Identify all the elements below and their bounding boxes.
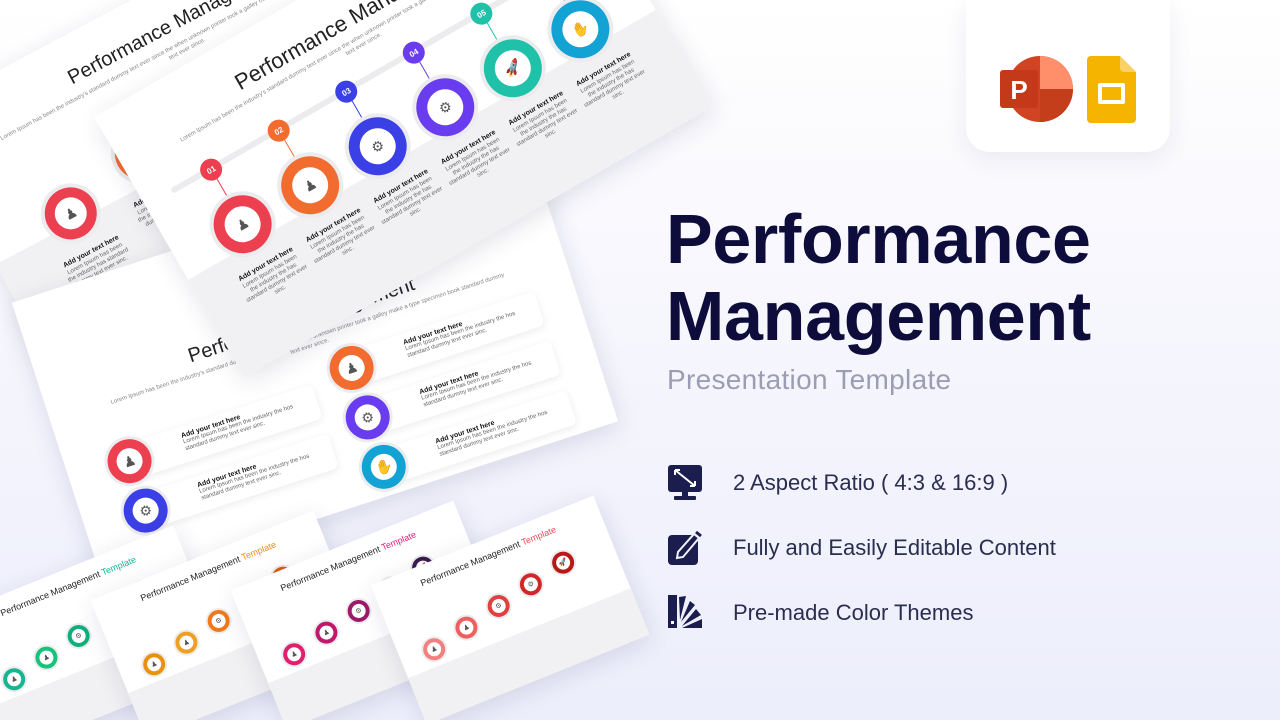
step 04: ⚙	[436, 97, 454, 117]
slide mockup: middle list layout: Lorem Ipsum has been the industry the hos standard dummy text ever sinc.	[437, 410, 548, 458]
small slide: orange theme: Performance Management Template	[139, 539, 278, 603]
feature: editable: Fully and Easily Editable Content	[733, 535, 1056, 560]
slide mockup: main front timeline	[94, 0, 712, 377]
slide mockup: back top-left: ♟	[131, 143, 150, 163]
slide mockup: middle list layout: ♟	[121, 451, 138, 470]
slide mockup: back top-left: 02	[186, 247, 201, 262]
step 05: 🚀	[501, 57, 524, 79]
small slide: red theme: 🚀	[558, 558, 569, 568]
title	[666, 200, 1091, 355]
small slide: orange theme: ♟	[150, 660, 159, 669]
slide mockup: main front timeline: Lorem Ipsum has been the industry the has standard dummy text ever sinc.	[445, 137, 511, 187]
slide mockup: back top-left: Lorem Ipsum has been the industry has standard dummy text ever sinc.	[137, 182, 200, 228]
slide mockup: main front timeline: ♟	[300, 175, 319, 195]
step 03: 03	[340, 86, 352, 98]
small slide: magenta theme: Performance Management Template	[279, 529, 418, 593]
small slide: red theme: ⚙	[495, 602, 503, 611]
slide mockup: main front timeline: 01	[205, 164, 217, 176]
slide mockup: main front timeline: Add your text here	[440, 129, 497, 166]
feature: aspect ratio: 2 Aspect Ratio ( 4:3 & 16:9 )	[733, 470, 1008, 495]
small slide: red theme: Performance Management Template	[419, 524, 558, 588]
slide mockup: main front timeline: Add your text here	[575, 51, 632, 88]
slide mockup: back top-left: 01	[116, 307, 131, 322]
feature: aspect ratio	[668, 465, 1008, 500]
icon: PowerPoint: P	[1010, 75, 1028, 105]
slide mockup: middle list layout: Lorem Ipsum has been the industry the hos standard dummy text ever sinc.	[199, 454, 310, 502]
small slide: orange theme: 🚀	[278, 573, 289, 583]
small slide: red theme: ⚙	[527, 580, 535, 589]
small slide: orange theme: ⚙	[215, 617, 223, 626]
slide mockup: back top-left	[0, 0, 534, 379]
small slide: green theme: ♟	[42, 654, 51, 662]
small slide: magenta theme	[231, 501, 509, 720]
slide mockup: middle list layout	[12, 136, 618, 588]
small slide: magenta theme: ⚙	[387, 585, 395, 594]
slide mockup: back top-left: Add your text here	[62, 234, 120, 269]
small slide: green theme	[0, 526, 229, 720]
small slide: orange theme: ♟	[182, 639, 191, 647]
step 01	[200, 158, 309, 304]
small slide: red theme: ♟	[462, 624, 471, 632]
slide mockup: main front timeline: ⚙	[368, 136, 387, 156]
slide mockup: middle list layout: Lorem Ipsum has been the industry the hos standard dummy text ever sinc.	[405, 311, 516, 359]
slide mockup: middle list layout: Add your text here	[180, 414, 241, 440]
small slide: green theme: Performance Management Template	[0, 554, 138, 618]
small slide: red theme	[371, 496, 649, 720]
feature: color themes	[668, 595, 973, 628]
slide mockup: middle list layout: ✋	[373, 456, 394, 477]
slide mockup: middle list layout: Add your text here	[435, 420, 496, 445]
step 05	[470, 2, 579, 148]
step 05: 05	[475, 8, 487, 20]
slide mockup: middle list layout: Lorem Ipsum has been the industry the hos standard dummy text ever sinc.	[183, 404, 294, 452]
small slide: green theme: ⚙	[107, 610, 115, 619]
slide mockup: main front timeline: Add your text here	[305, 207, 362, 244]
slide mockup: back top-left: Add your text here	[132, 174, 190, 209]
slide mockup: back top-left: Lorem Ipsum has been the industry has standard dummy text ever sinc.	[67, 242, 130, 288]
slide mockup: main front timeline: Lorem Ipsum has been the industry the has standard dummy text ever sinc.	[242, 254, 309, 304]
slide mockup: middle list layout: Performance Management	[185, 273, 417, 367]
subtitle: Presentation Template	[667, 364, 951, 395]
feature: editable	[668, 530, 1056, 565]
small slide: magenta theme: ♟	[322, 629, 331, 637]
slide mockup: middle list layout: ⚙	[359, 407, 376, 426]
small slide: magenta theme: 🚀	[418, 563, 429, 573]
slide mockup: back top-left: ♟	[61, 203, 80, 223]
small slide: green theme: ⚙	[75, 632, 83, 641]
icon: Google Slides	[1087, 56, 1136, 123]
icon: PowerPoint	[1000, 56, 1073, 122]
small slide: orange theme	[91, 511, 369, 720]
small slide: orange theme: ⚙	[247, 595, 255, 604]
title: Management	[666, 277, 1091, 355]
slide mockup: middle list layout: Lorem Ipsum has been the industry the hos standard dummy text ever sinc.	[421, 360, 532, 408]
slide mockup: main front timeline: Lorem Ipsum has been the industry the has standard dummy text ever sinc.	[310, 215, 376, 265]
slide mockup: middle list layout: ⚙	[137, 501, 154, 520]
step 03	[335, 80, 444, 226]
slide mockup: middle list layout: Add your text here	[196, 463, 257, 489]
slide mockup: middle list layout: ♟	[343, 358, 360, 377]
small slide: green theme: ♟	[10, 675, 19, 684]
step 02	[268, 120, 376, 265]
small slide: red theme: ♟	[430, 645, 439, 654]
slide mockup: main front timeline: Lorem Ipsum has been the industry the has standard dummy text ever sinc.	[580, 59, 646, 109]
slide mockup: middle list layout: Add your text here	[402, 321, 463, 347]
slide mockup: main front timeline: ✋	[569, 18, 592, 40]
slide mockup: middle list layout: Add your text here	[419, 370, 480, 396]
slide mockup: middle list layout: Lorem Ipsum has been the industry's standard dummy text ever since the when unknown printer took a galley make a type specimen book standard dummy text ever since.	[110, 272, 505, 406]
small slide: green theme: 🚀	[138, 588, 149, 598]
small slide: magenta theme: ♟	[290, 650, 299, 659]
slide mockup: main front timeline: Lorem Ipsum has been the industry the has standard dummy text ever sinc.	[377, 176, 444, 226]
slide mockup: main front timeline: ♟	[233, 214, 252, 234]
step 05: Add your text here	[508, 90, 565, 127]
step 04: 04	[408, 47, 420, 59]
slide mockup: main front timeline: Add your text here	[372, 168, 430, 205]
small slide: magenta theme: ⚙	[355, 607, 363, 616]
slide mockup: main front timeline: 02	[273, 125, 285, 137]
slide mockup: main front timeline: Add your text here	[237, 246, 294, 283]
feature: color themes: Pre-made Color Themes	[733, 600, 973, 625]
step 06	[548, 0, 646, 109]
slide mockup: main front timeline: Lorem Ipsum has been the industry the has standard dummy text ever sinc.	[512, 98, 579, 148]
title: Performance	[666, 200, 1091, 278]
step 04	[402, 42, 511, 187]
app icons card	[966, 0, 1170, 152]
